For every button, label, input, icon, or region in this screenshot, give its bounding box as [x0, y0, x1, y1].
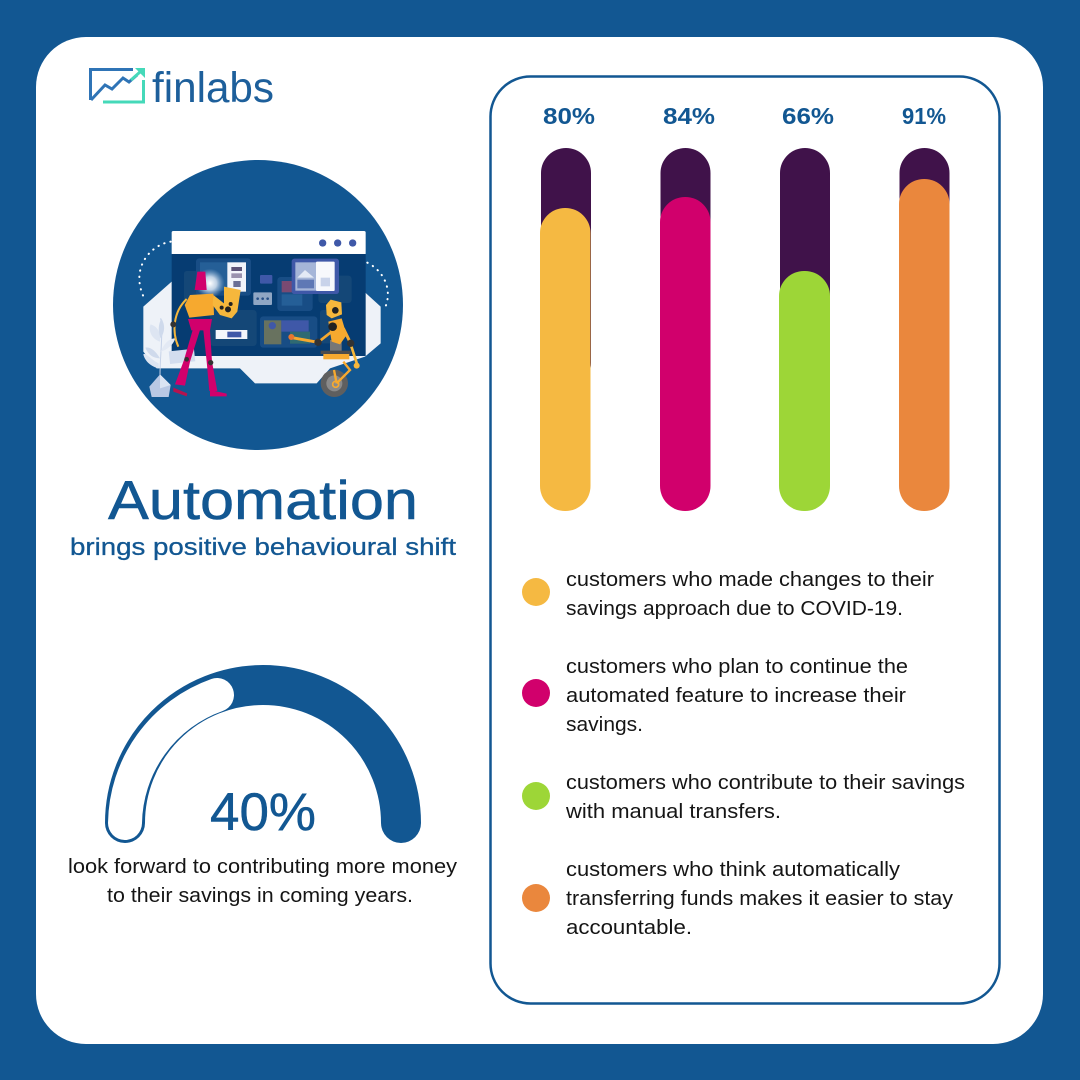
legend item: magenta: savings. — [566, 713, 643, 736]
legend item: green: with manual transfers. — [565, 800, 781, 823]
legend item: green: customers who contribute to their savings — [566, 771, 965, 794]
backdrop hexagon — [143, 282, 381, 383]
bar 80% — [540, 103, 595, 511]
dotted arcs — [139, 242, 171, 298]
bar 66%: 66% — [782, 103, 834, 129]
subheading: brings positive behavioural shift — [70, 534, 456, 561]
bar 91% — [899, 103, 950, 511]
bar 84% — [660, 103, 715, 511]
legend item: magenta — [522, 655, 908, 736]
gauge caption — [68, 855, 458, 907]
gauge caption: to their savings in coming years. — [107, 884, 413, 907]
legend item: magenta: automated feature to increase their — [566, 684, 906, 707]
browser window — [172, 231, 366, 255]
legend item: orange: transferring funds makes it easier to stay — [566, 887, 954, 910]
icon: logo chart — [90, 68, 145, 102]
gauge value: 40% — [210, 783, 316, 842]
bar 91%: 91% — [902, 103, 946, 129]
legend item: orange: customers who think automatically — [566, 858, 901, 881]
bar 84%: 84% — [663, 103, 715, 129]
icon: plant in vase — [143, 318, 195, 397]
gauge caption: look forward to contributing more money — [68, 855, 458, 878]
legend item: yellow — [522, 568, 934, 620]
legend item: yellow: savings approach due to COVID-19. — [566, 597, 903, 620]
icon: tall robot — [170, 272, 241, 396]
legend item: orange — [522, 858, 954, 939]
legend item: green — [522, 771, 965, 823]
bar 80%: 80% — [543, 103, 595, 129]
logo: finlabs — [90, 64, 274, 112]
bar 66% — [779, 103, 834, 511]
gauge: 40% — [125, 685, 401, 842]
logo wordmark: finlabs — [152, 64, 274, 112]
legend item: magenta: customers who plan to continue the — [566, 655, 908, 678]
illustration: robots at a dashboard — [113, 160, 403, 450]
bar chart — [540, 103, 950, 511]
icon: small robot on wheel — [288, 300, 360, 397]
heading: Automation — [108, 469, 418, 531]
panel: bar chart and legend — [490, 76, 1000, 1004]
legend item: orange: accountable. — [566, 916, 692, 939]
legend item: yellow: customers who made changes to their — [566, 568, 934, 591]
dashboard tiles — [184, 258, 352, 348]
